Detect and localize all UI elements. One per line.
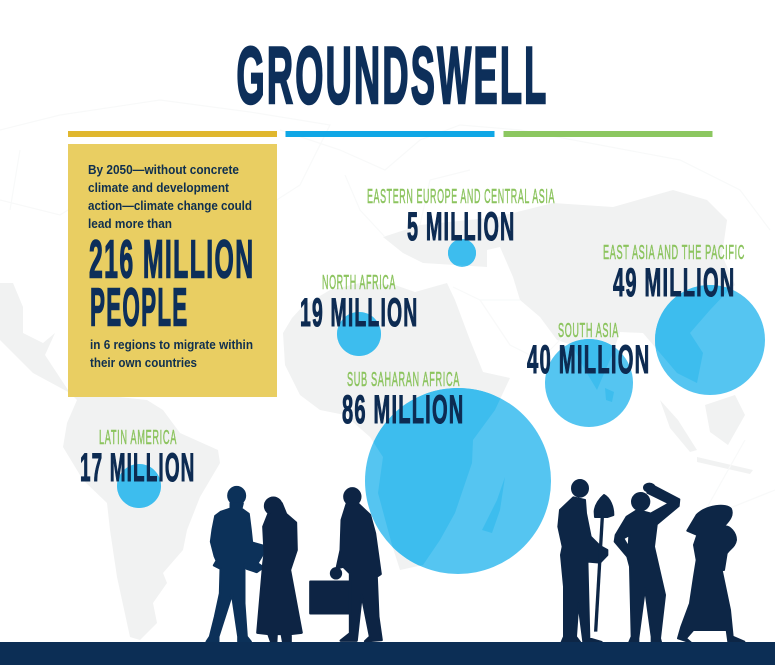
silhouettes: right group of people [558, 480, 744, 643]
region: South Asia [527, 320, 650, 382]
intro text [88, 163, 252, 231]
region: Latin America: LATIN AMERICA [99, 427, 177, 449]
intro text: climate and development [88, 181, 230, 195]
closing text [90, 338, 253, 370]
region: Eastern Europe and Central Asia: 5 MILLION [407, 205, 516, 249]
silhouettes: left group of people [207, 487, 382, 647]
region: South Asia: 40 MILLION [527, 338, 650, 382]
region: North Africa: NORTH AFRICA [322, 272, 396, 294]
man shading his head [615, 484, 679, 642]
headline figure [89, 230, 254, 338]
man with shovel [558, 480, 613, 642]
intro text: action—climate change could [88, 199, 252, 213]
man with briefcase [310, 488, 382, 641]
region: Eastern Europe and Central Asia [367, 186, 555, 249]
intro text: By 2050—without concrete [88, 163, 239, 177]
text: 17 MILLION [80, 446, 196, 490]
intro text: lead more than [88, 217, 172, 231]
region: Sub Saharan Africa: 86 MILLION [342, 388, 464, 432]
region: East Asia and the Pacific [603, 242, 745, 305]
region: South Asia: SOUTH ASIA [558, 320, 619, 342]
man [207, 487, 265, 642]
region: Latin America [80, 427, 196, 490]
headline figure: PEOPLE [90, 278, 188, 338]
green rule [504, 131, 712, 137]
closing text: in 6 regions to migrate within [90, 338, 253, 352]
panel: summary callout: 216 MILLION [89, 230, 254, 290]
blue rule [286, 131, 494, 137]
text: SUB SAHARAN AFRICA [347, 369, 460, 391]
woman carrying a bundle and child [678, 506, 744, 643]
region: North Africa [300, 272, 418, 335]
yellow rule [68, 131, 277, 137]
region: Sub Saharan Africa [342, 369, 464, 432]
panel: summary callout [68, 144, 277, 397]
proportional region circles [117, 239, 765, 574]
ground bar [0, 642, 775, 665]
text: 19 MILLION [300, 291, 418, 335]
woman [257, 498, 302, 647]
closing text: their own countries [90, 356, 197, 370]
